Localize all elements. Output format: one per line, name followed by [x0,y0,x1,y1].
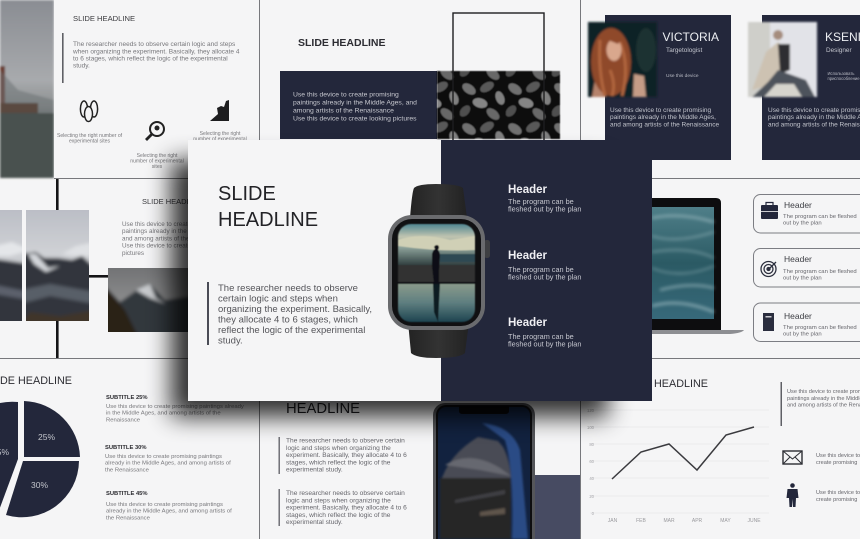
subtitle 25 [106,395,244,423]
caption person: Use this device to [816,490,860,496]
caption person: create promising [816,497,857,503]
caption: The program can be fleshed [783,325,857,331]
subtitle 25: Renaissance [106,417,141,423]
subtitle 25: SUBTITLE 25% [106,395,148,401]
slide: mountains [0,179,188,358]
line chart: APR [692,518,703,524]
card: Ksenia [748,15,860,160]
body text with rule: reflect the logic of the experimental [218,325,365,336]
accent box [535,475,580,539]
header 2: fleshed out by the plan [508,272,581,282]
slide: team cards [588,15,860,160]
header box 1 [754,194,860,233]
header 2: The program can be [508,265,574,274]
caption envelope: create promising [816,460,857,466]
body text with rule: they allocate 4 to 6 stages, which [218,314,358,326]
caption envelope: Use this device to [816,453,860,459]
case [388,215,485,330]
text block 1: stages, which reflect the logic of the [286,459,391,466]
label: Header [784,311,812,321]
line chart: 60 [589,459,595,464]
text block with rule [62,33,240,83]
slide headline: SLIDE HEADLINE [142,197,203,206]
strap top [410,184,467,218]
body text: and among artists of the Renaissance [122,235,228,242]
text block 2: stages, which reflect the logic of the [286,512,391,519]
header 1: Header [508,184,548,196]
icon: book [763,313,774,331]
black frame [453,13,544,143]
crown [484,240,490,258]
subtitle 30: SUBTITLE 30% [105,445,147,451]
photo: leaves [437,71,560,139]
description: and among artists of the Renaissance [610,121,720,128]
body text: pictures [122,250,144,257]
line chart: 40 [589,476,595,481]
text block with rule [780,382,860,426]
subtitle 30: the Renaissance [105,467,150,473]
slide headline: SLIDE HEADLINE [298,37,386,49]
text block 1: The researcher needs to observe certain [286,438,405,444]
slide: headline with icons [54,0,259,178]
header 3: Header [508,317,548,329]
watch screen photo [398,224,475,322]
slide: leaves panel [280,13,560,143]
line chart: FEB [636,518,647,524]
header box 2 [754,248,860,287]
caption: sites right: number of experimental [193,136,247,142]
phone [433,403,535,539]
smartwatch [388,184,490,358]
icon: bowling pins [80,101,98,122]
icon: climber [210,100,229,121]
caption: The program can be fleshed [783,269,857,275]
slide: laptop and headers [640,194,860,342]
text block with rule: to 6 stages, which reflect the logic of the experimental [73,56,228,62]
photo: mountain centre [26,210,89,321]
pie chart [0,401,80,517]
line chart: 120 [587,408,595,413]
text block 1 [278,437,407,474]
header 3: fleshed out by the plan [508,340,581,348]
description: paintings already in the Middle Ages, [610,114,716,121]
icon: target [761,262,776,276]
text block 1: experimental study. [286,467,343,474]
text block 2: experiment. Basically, they allocate 4 to 6 [286,505,407,512]
header 3 [508,317,581,348]
caption: out by the plan [783,276,822,282]
header 1 [508,184,581,214]
main slide shadow [171,160,608,417]
icon: person [786,483,798,507]
slide: line chart [587,378,860,524]
line chart: JUNE [747,518,761,524]
header 2: Header [508,250,548,262]
text block with rule: The researcher needs to observe certain logic and steps [73,41,236,48]
subtitle 25: Use this device to create promising paintings already [106,404,244,410]
label: Header [784,200,812,210]
laptop [640,198,744,334]
line chart: MAR [663,518,675,524]
line chart: JAN [608,518,618,524]
photo: mountain right [108,268,188,332]
navy text panel [280,71,437,139]
body text: Use this device to create promising [122,221,220,228]
slide headline: SLIDE HEADLINE [73,14,135,23]
label: Header [784,254,812,264]
subtitle 45 [106,491,232,521]
icon: envelope [783,451,802,464]
body text: Use this device to create looking [122,243,213,250]
title: HEADLINE [218,209,318,231]
line chart [587,408,769,524]
slide headline: HEADLINE [286,401,360,417]
title: SLIDE [218,183,276,205]
caption: out by the plan [783,220,822,226]
header 2 [508,250,581,282]
left panel [188,140,441,401]
slide: pie chart [0,375,244,521]
text block with rule: when organizing the experiment. Basically, they allocate 4 [72,48,240,56]
connector lines [56,178,108,358]
text block 1: experiment. Basically, they allocate 4 to 6 [286,452,407,459]
text block with rule: study. [73,62,90,70]
navy text panel: paintings already in the Middle Ages, and [293,100,417,106]
body text with rule: The researcher needs to observe [218,283,358,294]
subtitle 25: in the Middle Ages, and among artists of the [106,411,221,417]
text block 2: logic and steps when organizing the [286,497,391,504]
header 1: fleshed out by the plan [508,204,581,214]
caption: out by the plan [783,332,822,338]
right navy panel [441,140,652,401]
caption: sites middle: Selecting the right [137,153,178,159]
text block 2: experimental study. [286,519,343,526]
note: Use this device [666,73,699,79]
navy text panel: among artists of the Renaissance [293,108,394,114]
line chart: 0 [592,511,595,516]
pie chart: 25% [38,432,55,442]
body text with rule [207,282,372,346]
body text with rule: organizing the experiment. Basically, [218,304,372,315]
slide: phone [278,401,580,539]
icon: briefcase [761,202,778,219]
subtitle 30: Use this device to create promising paintings [105,454,222,460]
header 3: The program can be [508,332,574,341]
subtitle 45: Use this device to create promising paintings [106,502,223,508]
photo: mountain left [0,210,22,321]
caption: sites left: Selecting the right number of [57,133,123,139]
note: Использовать [828,71,855,76]
card: Victoria [588,15,731,160]
text block 1: logic and steps when organizing the [286,445,391,452]
subtitle 30: already in the Middle Ages, and among artists of [105,461,231,467]
slide headline: HEADLINE [654,378,708,390]
main slide [188,140,652,401]
body text with rule: certain logic and steps when [218,294,338,304]
role: Targetologist [666,47,702,54]
slide headline: DE HEADLINE [0,375,72,387]
strap bottom [408,322,469,358]
note: приспособление [828,76,860,81]
pie chart: 30% [31,480,48,490]
line chart: 20 [589,494,595,499]
caption: The program can be fleshed [783,214,857,220]
caption: sites right: Selecting the right [200,131,241,137]
photo: woman with red hair [588,22,657,97]
header 1: The program can be [508,197,574,206]
navy text panel: Use this device to create looking pictures [293,116,417,122]
body text: paintings already in the Middle Ages, [122,228,225,235]
line chart: 80 [589,442,595,447]
photo: foggy bridge [0,0,54,178]
role: Designer [826,47,852,54]
caption: sites middle: sites [152,164,163,170]
body text with rule: study. [218,336,243,346]
name: VICTORIA [662,30,719,44]
caption: sites left: experimental sites [69,138,110,144]
caption: sites middle: number of experimental [130,158,184,164]
navy text panel: Use this device to create promising [293,92,399,98]
icon: magnifier [146,122,164,140]
line chart: 100 [587,425,595,430]
subtitle 30 [105,445,231,473]
line chart: MAY [720,518,731,524]
description: Use this device to create promising [610,107,712,114]
subtitle 45: already in the Middle Ages, and among artists of [106,509,232,515]
text block 2: The researcher needs to observe certain [286,490,405,497]
subtitle 45: SUBTITLE 45% [106,491,148,497]
text block 2 [278,489,407,526]
header box 3 [754,303,860,342]
photo: woman in coat [748,22,817,97]
subtitle 45: the Renaissance [106,515,151,521]
